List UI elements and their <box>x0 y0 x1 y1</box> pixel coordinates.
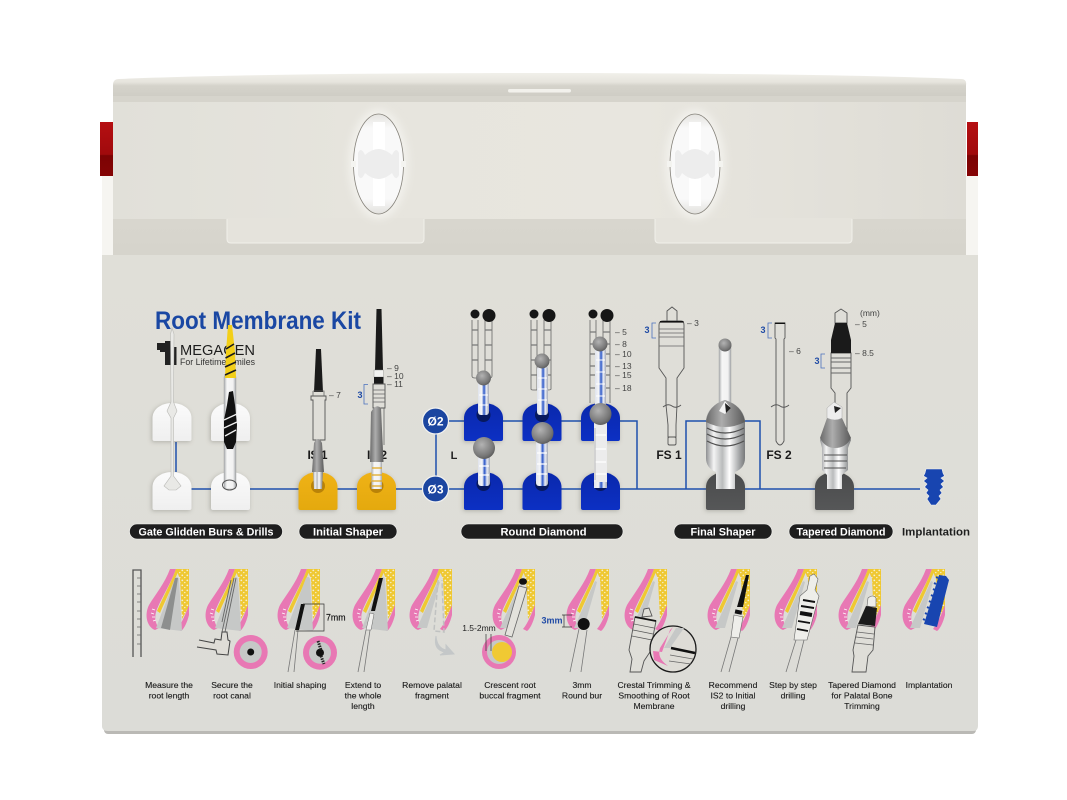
step 6: crescent root buccal fragment: buccal fragment <box>479 690 541 700</box>
section label: final shaper: Final Shaper <box>690 526 756 538</box>
lid <box>113 73 966 255</box>
tool: final shaper <box>706 338 745 489</box>
length scale labels: – 18 <box>615 383 632 393</box>
drawing: final shaper 1: 3 <box>644 325 650 335</box>
step 7: 3mm round bur: 3mm <box>572 680 592 690</box>
step 10: step by step drilling: Step by step <box>769 680 817 690</box>
step 1: measure root length: root length <box>149 690 190 700</box>
step 9: recommend IS2: IS2 to Initial <box>711 690 756 700</box>
tool: tapered diamond <box>820 402 851 489</box>
drawing: final shaper 2: FS 2 <box>766 448 792 462</box>
lower recessed band <box>113 219 966 255</box>
drawings: round diamond outlines <box>470 309 614 403</box>
step 9: recommend IS2 <box>708 569 758 711</box>
length scale labels: – 8 <box>615 339 627 349</box>
step 7: 3mm round bur <box>541 569 609 700</box>
logo mark <box>157 341 176 365</box>
step 6: crescent root buccal fragment: Crescent root <box>484 680 536 690</box>
drawing: final shaper 2: 3 <box>760 325 766 335</box>
step 7: 3mm round bur: Round bur <box>562 690 602 700</box>
diameter marker 2: Ø2 <box>427 414 444 428</box>
step 8: crestal trimming: Crestal Trimming & <box>617 680 691 690</box>
drawing: final shaper 2: – 6 <box>789 346 801 356</box>
implant <box>924 469 944 505</box>
tool: initial shaper 1 <box>312 439 324 489</box>
logo tagline: For Lifetime Smiles <box>180 357 255 367</box>
drawing: initial shaper 1 <box>308 349 341 462</box>
section label: initial shaper <box>299 524 397 539</box>
drawing: tapered diamond <box>814 308 880 440</box>
drawing: tapered diamond: (mm) <box>860 308 880 318</box>
step 4: extend to the whole length: length <box>351 701 375 711</box>
red latch right <box>967 122 978 176</box>
step 2: secure root canal: Secure the <box>211 680 253 690</box>
drawing: initial shaper 2: – 10 <box>387 371 404 381</box>
section label: round diamond: Round Diamond <box>500 526 586 538</box>
section label: round diamond <box>461 524 623 539</box>
logo: MegaGen <box>157 341 255 367</box>
step 11: tapered diamond palatal bone trimming: Trimming <box>844 701 880 711</box>
section label: implantation: Implantation <box>902 526 970 538</box>
step 4: extend to the whole length: Extend to <box>345 680 381 690</box>
tool: drill with yellow band <box>222 325 237 490</box>
step 8: crestal trimming <box>617 569 696 711</box>
step 4: extend to the whole length <box>345 569 395 711</box>
step 5: remove palatal fragment: Remove palatal <box>402 680 462 690</box>
step 10: step by step drilling: drilling <box>781 690 806 700</box>
magnifier <box>650 626 696 672</box>
step 7: 3mm round bur: 3mm <box>541 616 563 626</box>
drawing: tapered diamond: 3 <box>814 356 820 366</box>
kit tray <box>100 73 978 734</box>
white side rails <box>102 176 978 276</box>
holders: final shaper and tapered diamond <box>706 472 854 510</box>
section label: tapered diamond: Tapered Diamond <box>796 526 886 538</box>
holders: gate glidden <box>152 403 250 510</box>
step 9: recommend IS2: drilling <box>721 701 746 711</box>
tools: round diamond burs top row <box>476 336 608 415</box>
length scale labels: – 5 <box>615 327 627 337</box>
left tab <box>227 218 424 243</box>
right tab <box>655 218 852 243</box>
lid handle slot <box>508 89 571 92</box>
drawing: initial shaper 2 <box>357 309 404 462</box>
length label L: L <box>451 450 458 462</box>
step 3: initial shaping <box>274 569 346 690</box>
step 5: remove palatal fragment: fragment <box>415 690 450 700</box>
step 2: secure root canal <box>197 569 268 700</box>
step 9: recommend IS2: Recommend <box>709 680 758 690</box>
tray drop shadow <box>104 700 976 734</box>
length scale labels: – 15 <box>615 370 632 380</box>
section label: gate glidden: Gate Glidden Burs & Drills <box>138 526 274 538</box>
step 3: initial shaping: Initial shaping <box>274 680 326 690</box>
drawing: final shaper 2 <box>760 322 801 462</box>
right oval window <box>665 109 725 219</box>
step 5: remove palatal fragment <box>402 569 462 700</box>
drawing: initial shaper 1: IS 1 <box>308 448 328 462</box>
step 4: extend to the whole length: the whole <box>345 690 382 700</box>
step 11: tapered diamond palatal bone trimming: Tapered Diamond <box>828 680 896 690</box>
step 12: implantation: Implantation <box>906 680 953 690</box>
drawing: initial shaper 2: – 11 <box>387 379 403 389</box>
workflow connector lines <box>176 421 920 489</box>
tool: gate glidden bur <box>164 328 181 490</box>
section label: final shaper <box>674 524 772 539</box>
holders: initial shaper <box>298 472 396 510</box>
tray body <box>102 255 978 731</box>
tools: round diamond burs bottom row <box>473 403 612 488</box>
length scale labels: – 13 <box>615 361 632 371</box>
left oval window <box>348 109 408 219</box>
drawing: initial shaper 1: – 7 <box>329 390 341 400</box>
step 11: tapered diamond palatal bone trimming: for Palatal Bone <box>831 690 893 700</box>
ruler <box>133 570 141 657</box>
step 6: crescent root buccal fragment: 1.5-2mm <box>462 623 496 633</box>
section label: initial shaper: Initial Shaper <box>313 526 384 538</box>
drawing: tapered diamond: – 5 <box>855 319 867 329</box>
step 1: measure root length: Measure the <box>145 680 193 690</box>
lid face <box>113 102 966 255</box>
step 1: measure root length <box>133 569 193 700</box>
diameter marker 3: Ø3 <box>427 482 444 496</box>
step 3: initial shaping: 7mm <box>326 612 346 622</box>
step 11: tapered diamond palatal bone trimming <box>828 569 896 711</box>
drawing: initial shaper 2: – 9 <box>387 363 399 373</box>
tool: initial shaper 2 <box>370 406 384 489</box>
step 10: step by step drilling <box>769 569 819 700</box>
length scale labels: – 10 <box>615 349 632 359</box>
step 8: crestal trimming: Membrane <box>633 701 675 711</box>
diameter marker 3 <box>422 476 448 502</box>
drawing: tapered diamond: – 8.5 <box>855 348 874 358</box>
holders: round diamond <box>464 403 620 510</box>
step 6: crescent root buccal fragment <box>462 569 541 700</box>
step 12: implantation <box>903 569 953 690</box>
drawing: final shaper 1: FS 1 <box>656 448 682 462</box>
drawing: final shaper 1 <box>644 307 699 462</box>
step 8: crestal trimming: Smoothing of Root <box>618 690 690 700</box>
logo wordmark: MEGAGEN <box>180 342 255 359</box>
drawing: final shaper 1: – 3 <box>687 318 699 328</box>
length scale labels <box>615 327 632 393</box>
drawing: initial shaper 2: IS 2 <box>367 448 387 462</box>
red latch left <box>100 122 113 176</box>
diameter marker 2 <box>422 408 448 434</box>
drawing: initial shaper 2: 3 <box>357 390 363 400</box>
step 2: secure root canal: root canal <box>213 690 251 700</box>
lid rim <box>113 73 966 96</box>
title: Root Membrane Kit <box>155 307 362 335</box>
